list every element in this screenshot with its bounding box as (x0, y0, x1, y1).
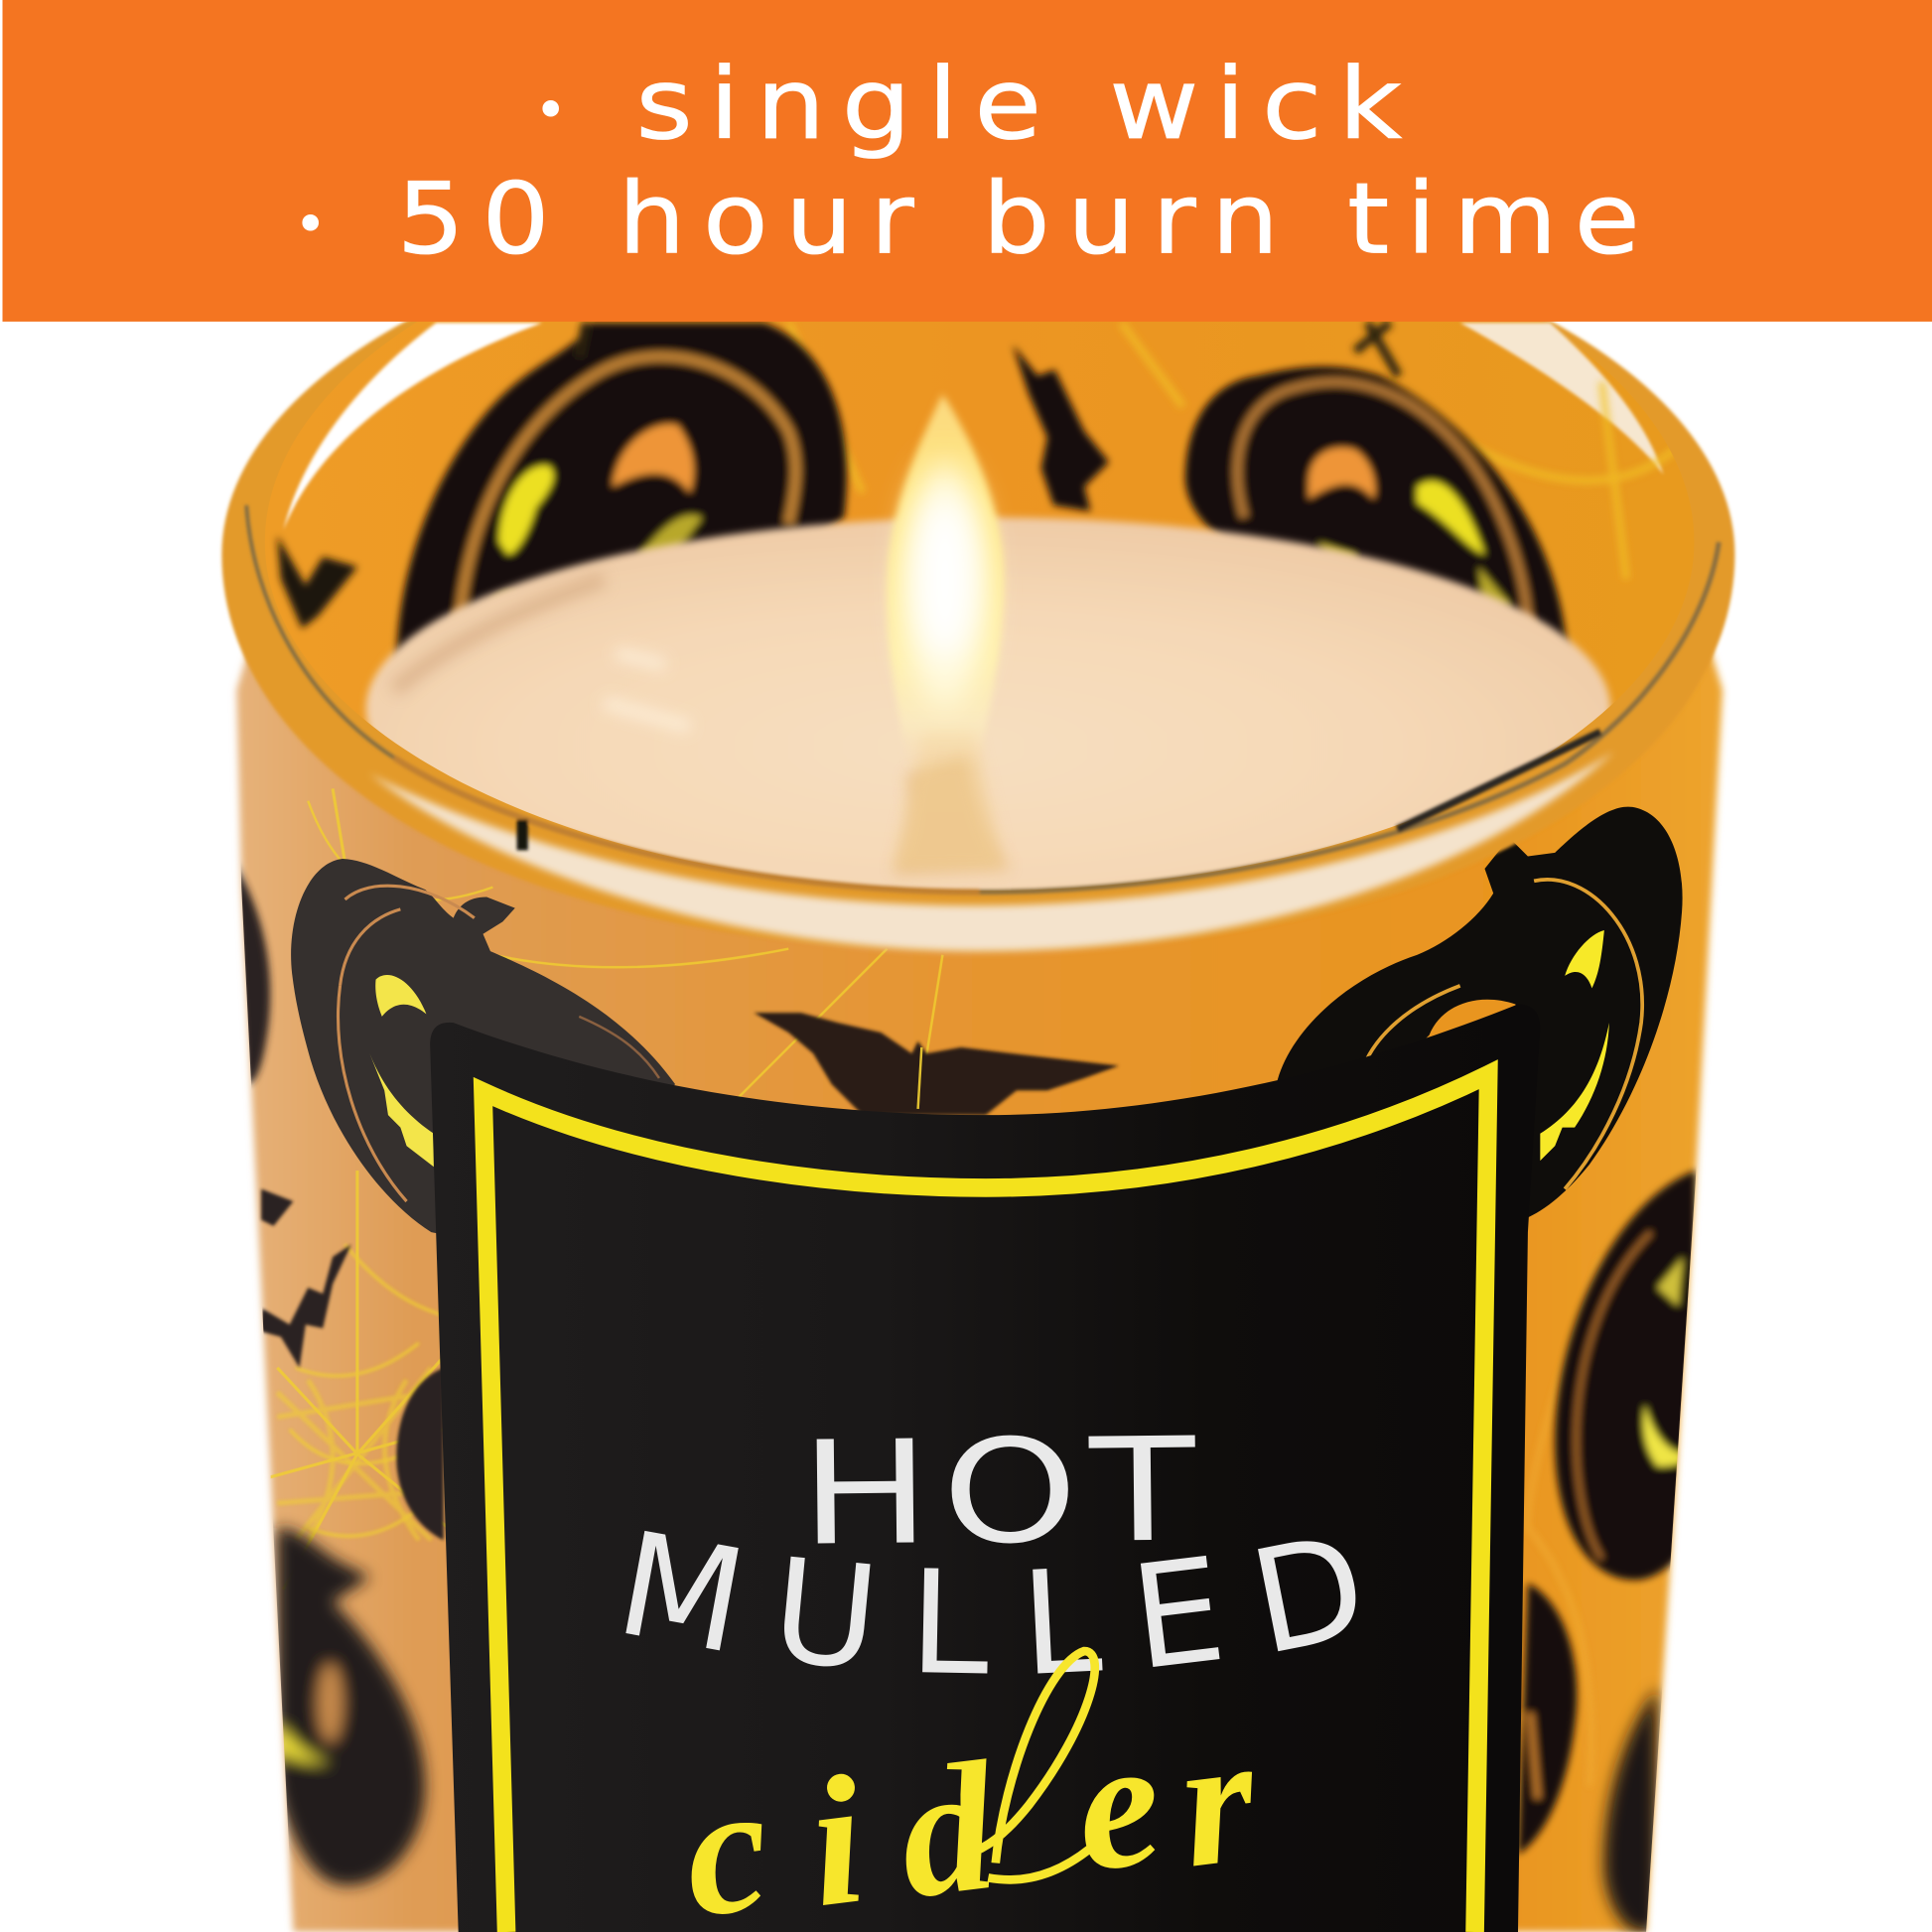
rim dark refraction lines (246, 505, 1719, 893)
left pumpkin (291, 859, 675, 1244)
interior right pumpkin (1185, 323, 1568, 653)
banner: 50 hour burn time (397, 162, 1657, 276)
lower-right pumpkin (1555, 1171, 1696, 1580)
flame (887, 394, 1004, 869)
far-left pumpkin (234, 863, 270, 1084)
script word: e (1065, 1698, 1172, 1911)
jar body (234, 617, 1723, 1932)
spider web on jar (270, 788, 1552, 1589)
banner line 2: • (294, 193, 328, 258)
label (390, 964, 1581, 1932)
interior bat left (277, 536, 357, 628)
flame core (903, 462, 987, 709)
bottom-right pumpkin (1604, 1688, 1657, 1932)
right pumpkin (1277, 807, 1683, 1220)
banner (2, 0, 1932, 322)
script word (673, 1651, 1268, 1932)
script word: r (1170, 1695, 1268, 1907)
glass rim (218, 322, 1737, 957)
script word: d (888, 1724, 1008, 1932)
label: MULLED (625, 1531, 1356, 1674)
interior web lines (788, 323, 1682, 579)
interior bat center (1013, 345, 1109, 511)
jar interior (265, 185, 1694, 891)
pale front lip (369, 752, 1614, 951)
pumpkin behind label, lower right (1518, 1584, 1577, 1855)
small pumpkin behind label (396, 1368, 444, 1540)
lower-left pumpkin (277, 1528, 425, 1885)
banner line 1: • (534, 77, 568, 143)
product name: HOT (799, 1406, 1208, 1578)
center bat (755, 1013, 1119, 1115)
interior left pumpkin (397, 323, 847, 690)
bats on left side (259, 1189, 351, 1368)
banner: single wick (635, 48, 1418, 162)
label gold border (483, 1074, 1488, 1932)
wax surface (366, 517, 1610, 899)
product name line 2 (613, 1629, 1365, 1673)
rim highlights (283, 323, 542, 530)
